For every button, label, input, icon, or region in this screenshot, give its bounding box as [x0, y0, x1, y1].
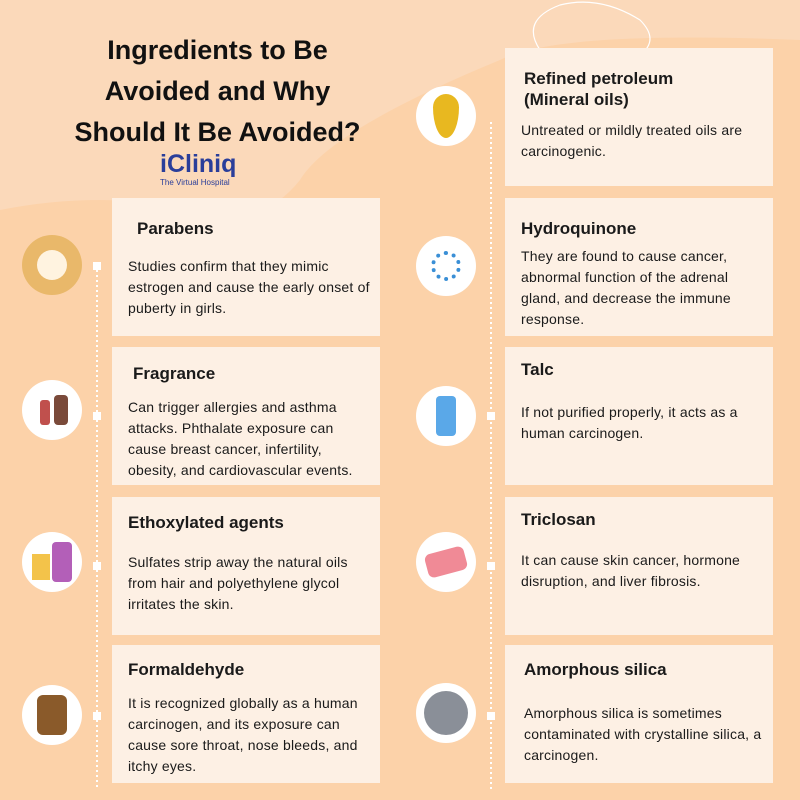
card: Parabens	[112, 198, 380, 336]
card: Refined petroleum: Refined petroleum	[524, 69, 673, 88]
connector dots	[93, 262, 495, 720]
card: Formaldehyde: It is recognized globally as a human	[128, 695, 358, 711]
card: Amorphous silica: Amorphous silica is sometimes	[524, 705, 722, 721]
card: Amorphous silica: contaminated with crystalline silica, a	[524, 726, 761, 742]
card: Formaldehyde: carcinogen, and its exposure can	[128, 716, 340, 732]
title: Ingredients to Be	[107, 35, 328, 65]
card: Triclosan: disruption, and liver fibrosis.	[521, 573, 701, 589]
card: Ethoxylated agents: Sulfates strip away the natural oils	[128, 554, 348, 570]
card: Parabens: Studies confirm that they mimic	[128, 258, 329, 274]
card: Formaldehyde: itchy eyes.	[128, 758, 196, 774]
card: Refined petroleum: Untreated or mildly treated oils are	[521, 122, 742, 138]
card: Parabens: Parabens	[137, 219, 214, 238]
card: Triclosan	[505, 497, 773, 635]
card: Fragrance: cause breast cancer, infertility,	[128, 441, 322, 457]
card: Hydroquinone: gland, and decrease the immune	[521, 290, 731, 306]
card: Hydroquinone	[505, 198, 773, 336]
card: Triclosan: It can cause skin cancer, hormone	[521, 552, 740, 568]
card: Fragrance: obesity, and cardiovascular events.	[128, 462, 353, 478]
card: Fragrance	[112, 347, 380, 485]
title: Should It Be Avoided?	[74, 117, 360, 147]
card: Fragrance: Fragrance	[133, 364, 215, 383]
card: Refined petroleum: (Mineral oils)	[524, 90, 629, 109]
icon: fragrance spray	[22, 380, 82, 440]
icon: ethoxylated bottles	[22, 532, 82, 592]
card: Amorphous silica: Amorphous silica	[524, 660, 667, 679]
card: Ethoxylated agents: irritates the skin.	[128, 596, 234, 612]
card: Refined petroleum: carcinogenic.	[521, 143, 606, 159]
card: Hydroquinone: response.	[521, 311, 584, 327]
card: Refined petroleum	[505, 48, 773, 186]
card: Hydroquinone: abnormal function of the adrenal	[521, 269, 728, 285]
card: Formaldehyde: Formaldehyde	[128, 660, 244, 679]
card: Formaldehyde: cause sore throat, nose bleeds, and	[128, 737, 358, 753]
card: Talc	[505, 347, 773, 485]
logo: iCliniq	[160, 150, 236, 178]
card: Talc: Talc	[521, 360, 554, 379]
card: Ethoxylated agents	[112, 497, 380, 635]
icon: oil drop	[416, 86, 476, 146]
card: Hydroquinone: Hydroquinone	[521, 219, 636, 238]
card: Talc: human carcinogen.	[521, 425, 643, 441]
icon: silica	[416, 683, 476, 743]
card: Formaldehyde	[112, 645, 380, 783]
card: Talc: If not purified properly, it acts as a	[521, 404, 738, 420]
icon: formaldehyde jar	[22, 685, 82, 745]
card: Ethoxylated agents: from hair and polyethylene glycol	[128, 575, 339, 591]
icon: paraben free badge	[22, 235, 82, 295]
card: Fragrance: attacks. Phthalate exposure can	[128, 420, 333, 436]
icon: soap bar	[416, 532, 476, 592]
logo: The Virtual Hospital	[160, 178, 230, 187]
icon: talc bottle	[416, 386, 476, 446]
card: Amorphous silica	[505, 645, 773, 783]
card: Hydroquinone: They are found to cause cancer,	[521, 248, 727, 264]
card: Ethoxylated agents: Ethoxylated agents	[128, 513, 284, 532]
card: Parabens: puberty in girls.	[128, 300, 226, 316]
title: Avoided and Why	[105, 76, 330, 106]
icon: molecule	[416, 236, 476, 296]
card: Fragrance: Can trigger allergies and asthma	[128, 399, 337, 415]
card: Parabens: estrogen and cause the early onset of	[128, 279, 370, 295]
card: Amorphous silica: carcinogen.	[524, 747, 599, 763]
card: Triclosan: Triclosan	[521, 510, 596, 529]
title	[74, 35, 360, 147]
